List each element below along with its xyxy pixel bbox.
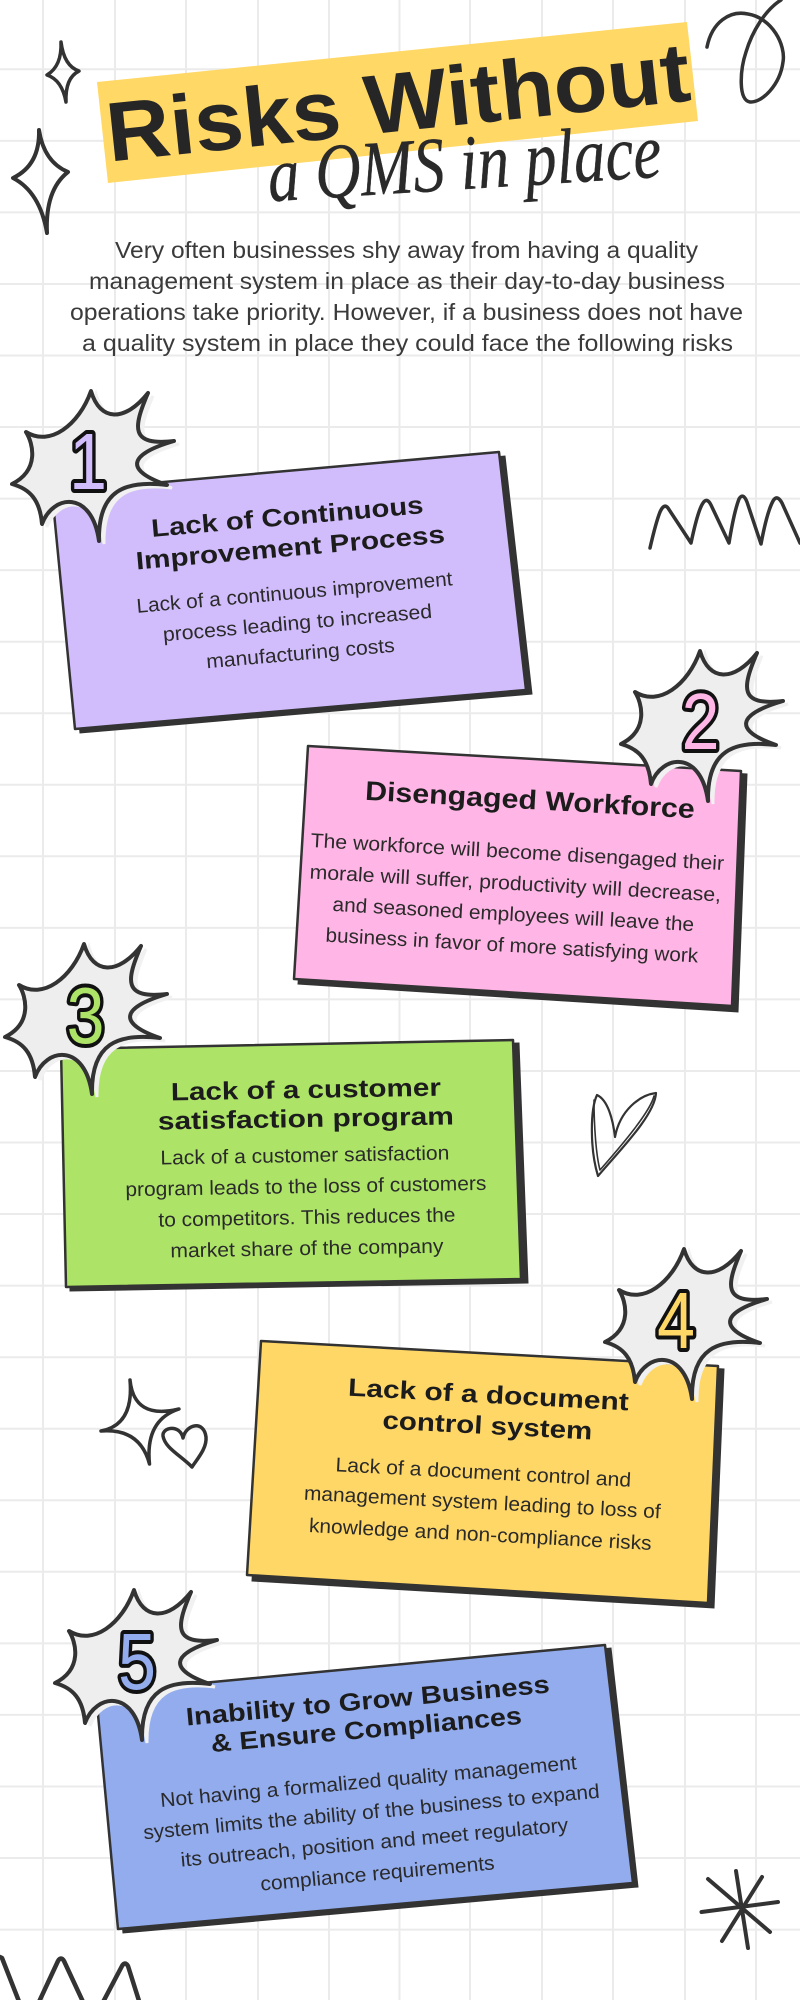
heading: risk 4: Lack of a document — [347, 1374, 630, 1416]
body: risk 2: business in favor of more satisfying work — [325, 925, 700, 967]
body: risk 5: its outreach, position and meet regulatory — [180, 1814, 569, 1872]
panel: risk 2 — [294, 746, 747, 1012]
badge: number 3: 3 — [67, 971, 104, 1060]
body: risk 4: Lack of a document control and — [335, 1454, 632, 1492]
body: risk 3: to competitors. This reduces the — [158, 1204, 456, 1232]
heading: risk 5: & Ensure Compliances — [210, 1702, 523, 1758]
body: risk 5 — [142, 1752, 601, 1896]
body: risk 3 — [125, 1142, 487, 1262]
intro paragraph: Very often businesses shy away from having a quality — [115, 237, 698, 263]
intro paragraph: a quality system in place they could face the following risks — [82, 330, 733, 356]
heading: risk 3 — [158, 1074, 454, 1136]
body: risk 5: system limits the ability of the business to expand — [142, 1781, 601, 1844]
icon: bottom zigzag — [0, 1957, 140, 2000]
icon: small sparkle — [47, 42, 79, 102]
badge: number 5: 5 — [118, 1617, 156, 1706]
panel: risk 5 — [96, 1645, 638, 1933]
body: risk 3: program leads to the loss of customers — [125, 1173, 487, 1201]
heading: risk 2: Disengaged Workforce — [364, 776, 696, 824]
body: risk 2 — [309, 830, 725, 967]
intro paragraph: operations take priority. However, if a business does not have — [70, 299, 743, 325]
badge: number 1: 1 — [69, 417, 107, 506]
heading: risk 5: Inability to Grow Business — [185, 1671, 551, 1732]
subtitle: a QMS in place: a QMS in place — [265, 107, 664, 218]
body: risk 5: compliance requirements — [259, 1852, 495, 1896]
heading: risk 1: Lack of Continuous — [150, 491, 425, 543]
icon: asterisk — [702, 1871, 778, 1948]
heading: risk 5 — [185, 1671, 551, 1758]
body: risk 1: manufacturing costs — [205, 635, 396, 673]
body: risk 1: Lack of a continuous improvement — [136, 568, 454, 618]
heading: risk 4: control system — [382, 1407, 593, 1445]
body: risk 3: market share of the company — [170, 1236, 444, 1262]
heading: risk 1: Improvement Process — [135, 521, 446, 575]
body: risk 4 — [303, 1454, 662, 1555]
body: risk 1: process leading to increased — [162, 601, 433, 646]
badge: number 2 — [621, 651, 788, 804]
body: risk 4: knowledge and non-compliance risks — [308, 1515, 652, 1555]
icon: large sparkle — [13, 130, 68, 233]
icon: outlined heart — [592, 1093, 656, 1176]
badge: number 4: 4 — [657, 1276, 695, 1365]
body: risk 1 — [136, 568, 454, 673]
intro paragraph: management system in place as their day-to-day business — [89, 268, 725, 294]
panel: risk 3 — [61, 1040, 528, 1291]
badge: number 1 — [12, 391, 179, 544]
intro paragraph — [70, 237, 743, 356]
title band — [97, 22, 698, 183]
title: Risks Without: Risks Without — [102, 25, 694, 180]
badge: number 2: 2 — [682, 677, 719, 766]
badge: number 4 — [605, 1249, 772, 1402]
body: risk 5: Not having a formalized quality management — [159, 1752, 578, 1812]
body: risk 4: management system leading to loss of — [303, 1483, 662, 1523]
panel: risk 1 — [52, 452, 532, 733]
heading: risk 3: satisfaction program — [158, 1102, 454, 1136]
icon: top right loop scribble — [707, 0, 783, 102]
panel: risk 4 — [247, 1341, 724, 1608]
heading: risk 3: Lack of a customer — [171, 1074, 441, 1106]
heading: risk 1 — [135, 491, 446, 575]
body: risk 3: Lack of a customer satisfaction — [160, 1142, 450, 1170]
heading: risk 4 — [347, 1374, 630, 1445]
body: risk 2: and seasoned employees will leave the — [332, 894, 695, 936]
badge: number 5 — [55, 1590, 222, 1743]
icon: sparkle and heart — [101, 1380, 206, 1467]
body: risk 2: morale will suffer, productivity will decrease, — [309, 862, 722, 906]
badge: number 3 — [5, 944, 172, 1097]
icon: right zigzag — [650, 496, 800, 548]
body: risk 2: The workforce will become disengaged their — [310, 830, 725, 875]
